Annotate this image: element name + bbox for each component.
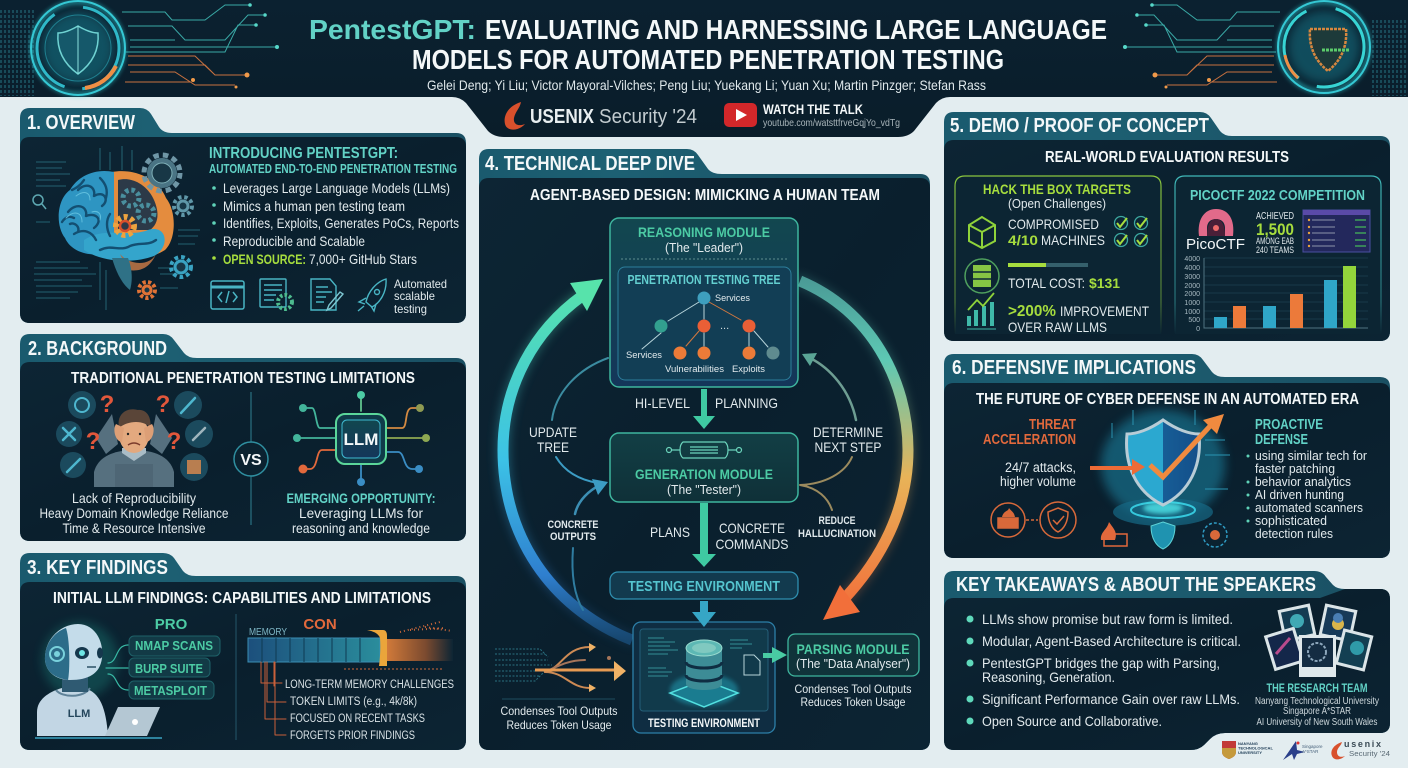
text: research team: [1255, 681, 1379, 728]
text block: introduction: INTRODUCING PENTESTGPT:: [209, 145, 398, 162]
arrow: determine next step: NEXT STEP: [814, 439, 882, 455]
bar chart: 3000: [1184, 274, 1200, 281]
panel: 1 overview: [20, 108, 466, 323]
logo: A*STAR: A*STAR: [1302, 749, 1319, 754]
illustration: stressed tester with tools: ?: [156, 391, 170, 418]
card: hack the box: [955, 176, 1161, 335]
label: pro: PRO: [155, 616, 188, 633]
box: testing environment label: [610, 572, 798, 599]
header banner: [0, 0, 1408, 137]
module: generation: GENERATION MODULE: [635, 466, 773, 482]
icon: firewall to shield: [991, 502, 1076, 538]
improvement: IMPROVEMENT: [1060, 303, 1149, 319]
text: emerging opportunity: reasoning and knowledge: [292, 520, 430, 536]
arrow: large left feedback arc: [503, 279, 632, 640]
bar chart: 2000: [1184, 283, 1200, 290]
card: hack the box: (Open Challenges): [1008, 196, 1106, 211]
icon: LLM chip with circuit lines: LLM: [344, 430, 378, 449]
takeaways list: LLMs show promise but raw form is limited.: [982, 611, 1233, 627]
text: research team: THE RESEARCH TEAM: [1266, 681, 1368, 695]
caption: automated scalable testing: [394, 277, 447, 316]
text: limitations: Lack of Reproducibility: [72, 490, 196, 506]
improvement: OVER RAW LLMS: [1008, 319, 1107, 335]
arrow: large right arc: [800, 281, 908, 620]
text: research team: Singapore A*STAR: [1283, 706, 1351, 717]
panel: 4 technical deep dive: [479, 149, 930, 750]
stat: 1,500: ACHIEVED: [1256, 211, 1294, 222]
heading: 2. BACKGROUND: [28, 338, 167, 360]
bar chart: 1000: [1184, 309, 1200, 316]
arrow: to parsing module: [763, 647, 787, 663]
stat: 1,500: 240 TEAMS: [1256, 245, 1294, 255]
sub-panel: penetration testing tree: Exploits: [732, 364, 765, 375]
logos: institutions: [1222, 739, 1390, 760]
takeaways list: Significant Performance Gain over raw LLMs.: [982, 691, 1240, 707]
arrow: update tree: [529, 358, 608, 483]
divider: [250, 392, 252, 525]
text: proactive defense: faster patching: [1255, 461, 1335, 476]
icon: coin stack: [965, 259, 999, 293]
pro tools list: METASPLOIT: [134, 683, 207, 698]
subheading: AGENT-BASED DESIGN: MIMICKING A HUMAN TEAM: [530, 187, 880, 204]
logo: picoCTF: [1186, 209, 1245, 253]
decoration: left shield emblem: [0, 1, 279, 96]
title: [309, 14, 1107, 75]
sub-panel: penetration testing tree: ...: [720, 320, 729, 332]
illustration: stressed tester with tools: ?: [167, 428, 181, 455]
label: reduce hallucination: HALLUCINATION: [798, 528, 876, 540]
logo: usenix: [1331, 739, 1390, 759]
sub-panel: penetration testing tree: [618, 267, 791, 380]
authors: Gelei Deng; Yi Liu; Victor Mayoral-Vilches; Peng Liu; Yuekang Li; Yuan Xu; Martin Pinzger; Stefan Rass: [427, 77, 986, 93]
conference badge: [505, 102, 697, 130]
illustration: stressed tester with tools: ?: [100, 391, 114, 418]
cost progress bar: TOTAL COST:: [1008, 275, 1085, 291]
improvement: [1008, 303, 1149, 335]
text: proactive defense: [1246, 417, 1368, 541]
arrow: concrete outputs: [548, 479, 608, 610]
conference badge: USENIX: [530, 106, 595, 128]
text: threat acceleration: THREAT: [1029, 417, 1076, 433]
leaderboard thumbnail: [1303, 210, 1370, 252]
logo: NTU: UNIVERSITY: [1238, 750, 1262, 755]
arrow: plans and concrete commands: COMMANDS: [716, 536, 788, 552]
heading: 1. OVERVIEW: [27, 112, 135, 134]
bar chart: 500: [1188, 317, 1200, 324]
stat: 1,500: [1256, 211, 1294, 255]
arrow: to environment: [692, 601, 716, 627]
text: proactive defense: sophisticated: [1255, 513, 1327, 528]
icon: document with pen: [311, 279, 343, 310]
subheading: TRADITIONAL PENETRATION TESTING LIMITATIONS: [71, 370, 415, 387]
bullet list: [212, 180, 459, 267]
bullet list: Reproducible and Scalable: [223, 233, 365, 249]
arrow: concrete outputs: OUTPUTS: [550, 531, 596, 543]
illustration: brain with gears: [33, 146, 200, 310]
watch the talk link: [724, 101, 900, 129]
arrow: concrete outputs: CONCRETE: [548, 519, 598, 531]
arrow: determine next step: DETERMINE: [813, 424, 883, 440]
arrow: plans and concrete commands: CONCRETE: [719, 520, 785, 536]
icon: cube: [969, 217, 995, 248]
text: research team: AI University of New South Wales: [1256, 717, 1378, 728]
divider: [235, 614, 237, 740]
logo: usenix: usenix: [1344, 739, 1381, 749]
logo: NTU: [1222, 741, 1273, 759]
caption: automated scalable testing: Automated: [394, 277, 447, 291]
arrow: hi-level planning: PLANNING: [715, 395, 778, 411]
panel: 2 background: [20, 334, 466, 541]
text: emerging opportunity: [286, 490, 436, 536]
text: proactive defense: using similar tech for: [1255, 448, 1368, 463]
con list: LONG-TERM MEMORY CHALLENGES: [285, 679, 454, 691]
card: picoctf: [1175, 176, 1381, 334]
text: threat acceleration: 24/7 attacks,: [1005, 460, 1076, 475]
text: threat acceleration: ACCELERATION: [983, 432, 1076, 448]
illustration: LLM robot with laptop: [35, 622, 162, 738]
illustration: LLM robot with laptop: LLM: [68, 708, 90, 720]
module: parsing: PARSING MODULE: [796, 641, 910, 657]
sub-panel: penetration testing tree: Services: [626, 350, 662, 361]
text: limitations: Heavy Domain Knowledge Reliance: [40, 505, 229, 521]
box: testing environment with database: TESTING ENVIRONMENT: [648, 718, 760, 730]
watch the talk link: WATCH THE TALK: [763, 101, 863, 117]
con list: FOCUSED ON RECENT TASKS: [290, 713, 425, 725]
icon: document with gear: [260, 279, 292, 309]
heading: 4. TECHNICAL DEEP DIVE: [485, 153, 695, 175]
subheading: INITIAL LLM FINDINGS: CAPABILITIES AND LIMITATIONS: [53, 590, 431, 607]
module: parsing: (The "Data Analyser"): [796, 657, 910, 671]
title: PentestGPT:: [309, 14, 476, 45]
caption: parsing left: Reduces Token Usage: [506, 718, 612, 732]
bar chart: 0: [1196, 326, 1200, 333]
title: EVALUATING AND HARNESSING LARGE LANGUAGE: [485, 14, 1107, 45]
checkmarks: [1114, 216, 1148, 246]
icon: LLM chip with circuit lines: [293, 391, 430, 486]
decoration: right shield emblem: [1123, 1, 1408, 96]
heading: 6. DEFENSIVE IMPLICATIONS: [952, 357, 1196, 379]
VS badge: [234, 442, 268, 476]
text: proactive defense: DEFENSE: [1255, 432, 1308, 448]
subheading: THE FUTURE OF CYBER DEFENSE IN AN AUTOMATED ERA: [976, 391, 1359, 408]
text: limitations: [40, 490, 229, 536]
machines compromised: [1008, 216, 1105, 248]
panel: key takeaways and speakers: [944, 571, 1390, 750]
label: reduce hallucination: REDUCE: [818, 515, 856, 527]
heading: 3. KEY FINDINGS: [27, 557, 168, 579]
bar chart: 1000: [1184, 300, 1200, 307]
module: parsing: [788, 634, 919, 676]
pro tools list: NMAP SCANS: [135, 638, 213, 653]
text: threat acceleration: [983, 417, 1076, 489]
connector lines: [106, 645, 128, 690]
logo: NTU: TECHNOLOGICAL: [1238, 746, 1273, 750]
caption: parsing left: Condenses Tool Outputs: [500, 704, 618, 718]
arrow: plans and concrete commands: PLANS: [650, 524, 690, 540]
icon: growth chart: [967, 293, 996, 329]
heading: 5. DEMO / PROOF OF CONCEPT: [950, 115, 1209, 137]
caption: automated scalable testing: scalable: [394, 289, 435, 303]
text: limitations: Time & Resource Intensive: [62, 520, 206, 536]
card: picoctf: PICOCTF 2022 COMPETITION: [1190, 188, 1365, 204]
module: reasoning: REASONING MODULE: [638, 224, 770, 240]
bar chart: 4000: [1184, 265, 1200, 272]
conference badge: Security '24: [599, 106, 697, 128]
bullet list: Identifies, Exploits, Generates PoCs, Reports: [223, 215, 459, 231]
caption: parsing right: Reduces Token Usage: [800, 695, 906, 709]
stat: 1,500: AMONG EAB: [1256, 236, 1294, 246]
machines compromised: COMPROMISED: [1008, 216, 1099, 232]
con list: [261, 662, 454, 742]
logo: picoCTF: PicoCTF: [1186, 236, 1245, 253]
illustration: stressed tester with tools: [56, 391, 213, 487]
sub-panel: penetration testing tree: Vulnerabilities: [665, 364, 724, 375]
sub-panel: penetration testing tree: Services: [715, 293, 750, 304]
caption: parsing left: [500, 699, 618, 732]
bullet list: OPEN SOURCE:: [223, 251, 306, 267]
takeaways list: Modular, Agent-Based Architecture is critical.: [982, 633, 1241, 649]
illustration: shield with rising arrow: [1090, 410, 1230, 549]
bullet list: Mimics a human pen testing team: [223, 198, 405, 214]
text: proactive defense: detection rules: [1255, 526, 1333, 541]
memory bar: MEMORY: [249, 627, 287, 638]
pro tools list: [129, 636, 220, 699]
text: proactive defense: AI driven hunting: [1255, 487, 1344, 502]
module: reasoning: [610, 218, 798, 387]
text: research team: Nanyang Technological University: [1255, 696, 1379, 707]
caption: automated scalable testing: testing: [394, 302, 427, 316]
arrow: hi-level planning: HI-LEVEL: [635, 395, 690, 411]
cost progress bar: [1008, 263, 1120, 291]
takeaways list: Open Source and Collaborative.: [982, 713, 1162, 729]
arrow: hi-level planning: [635, 389, 778, 429]
icon: rocket: [358, 279, 386, 311]
logo: A*STAR: [1283, 741, 1323, 760]
panel: 5 demo / proof of concept: [944, 112, 1390, 341]
module: generation: [610, 433, 798, 502]
text: proactive defense: PROACTIVE: [1255, 417, 1323, 433]
machines compromised: MACHINES: [1041, 232, 1105, 248]
logo: NTU: NANYANG: [1238, 741, 1258, 746]
caption: parsing right: [794, 682, 912, 709]
label: con: CON: [303, 616, 337, 633]
text: proactive defense: behavior analytics: [1255, 474, 1351, 489]
module: reasoning: (The "Leader"): [665, 240, 743, 255]
memory bar: [248, 622, 453, 669]
panel: 6 defensive implications: [944, 354, 1390, 558]
box: testing environment label: TESTING ENVIRONMENT: [628, 578, 780, 595]
text: emerging opportunity: Leveraging LLMs for: [299, 505, 423, 521]
heading: KEY TAKEAWAYS & ABOUT THE SPEAKERS: [956, 574, 1316, 596]
watch the talk link: youtube.com/watsttfrveGqjYo_vdTg: [763, 117, 900, 129]
logo: A*STAR: Singapore: [1302, 744, 1323, 749]
bullet list: Leverages Large Language Models (LLMs): [223, 180, 450, 196]
takeaways list: [966, 611, 1241, 729]
cost progress bar: $131: [1089, 275, 1120, 291]
arrow: update tree: UPDATE: [529, 424, 577, 440]
logo: usenix: Security '24: [1349, 749, 1390, 758]
takeaways list: PentestGPT bridges the gap with Parsing,: [982, 655, 1220, 671]
arrow: update tree: TREE: [537, 439, 569, 455]
caption: parsing right: Condenses Tool Outputs: [794, 682, 912, 696]
arrow: plans and concrete commands: [650, 503, 788, 567]
panel: 3 key findings: [20, 553, 466, 750]
bullet list: 7,000+ GitHub Stars: [309, 251, 417, 267]
bar chart: 2000: [1184, 291, 1200, 298]
text block: introduction: AUTOMATED END-TO-END PENETRATION TESTING: [209, 162, 457, 176]
sub-panel: penetration testing tree: PENETRATION TESTING TREE: [628, 273, 780, 287]
card: hack the box: HACK THE BOX TARGETS: [983, 181, 1131, 197]
takeaways list: Reasoning, Generation.: [982, 669, 1115, 685]
improvement: >200%: [1008, 303, 1056, 320]
text: emerging opportunity: EMERGING OPPORTUNITY:: [286, 490, 436, 506]
title: MODELS FOR AUTOMATED PENETRATION TESTING: [412, 44, 1004, 75]
con list: FORGETS PRIOR FINDINGS: [290, 730, 415, 742]
bar chart: [1184, 256, 1368, 333]
text block: introduction: [209, 145, 457, 176]
VS badge: VS: [240, 452, 262, 469]
illustration: stressed tester with tools: ?: [86, 428, 100, 455]
con list: TOKEN LIMITS (e.g., 4k/8k): [290, 696, 417, 708]
illustration: team photos: [1266, 605, 1372, 677]
subheading: REAL-WORLD EVALUATION RESULTS: [1045, 149, 1289, 166]
illustration: data stream into environment: [495, 643, 626, 692]
machines compromised: 4/10: [1008, 232, 1038, 248]
pro tools list: BURP SUITE: [135, 661, 203, 676]
box: testing environment with database: [633, 622, 775, 733]
icon: code window: [211, 281, 244, 309]
arrow: determine next step: [800, 353, 883, 510]
text: proactive defense: automated scanners: [1255, 500, 1363, 515]
text: threat acceleration: higher volume: [1000, 474, 1076, 489]
stat: 1,500: 1,500: [1256, 220, 1294, 239]
module: generation: (The "Tester"): [667, 482, 741, 497]
bar chart: 4000: [1184, 256, 1200, 263]
label: reduce hallucination: [798, 515, 876, 540]
